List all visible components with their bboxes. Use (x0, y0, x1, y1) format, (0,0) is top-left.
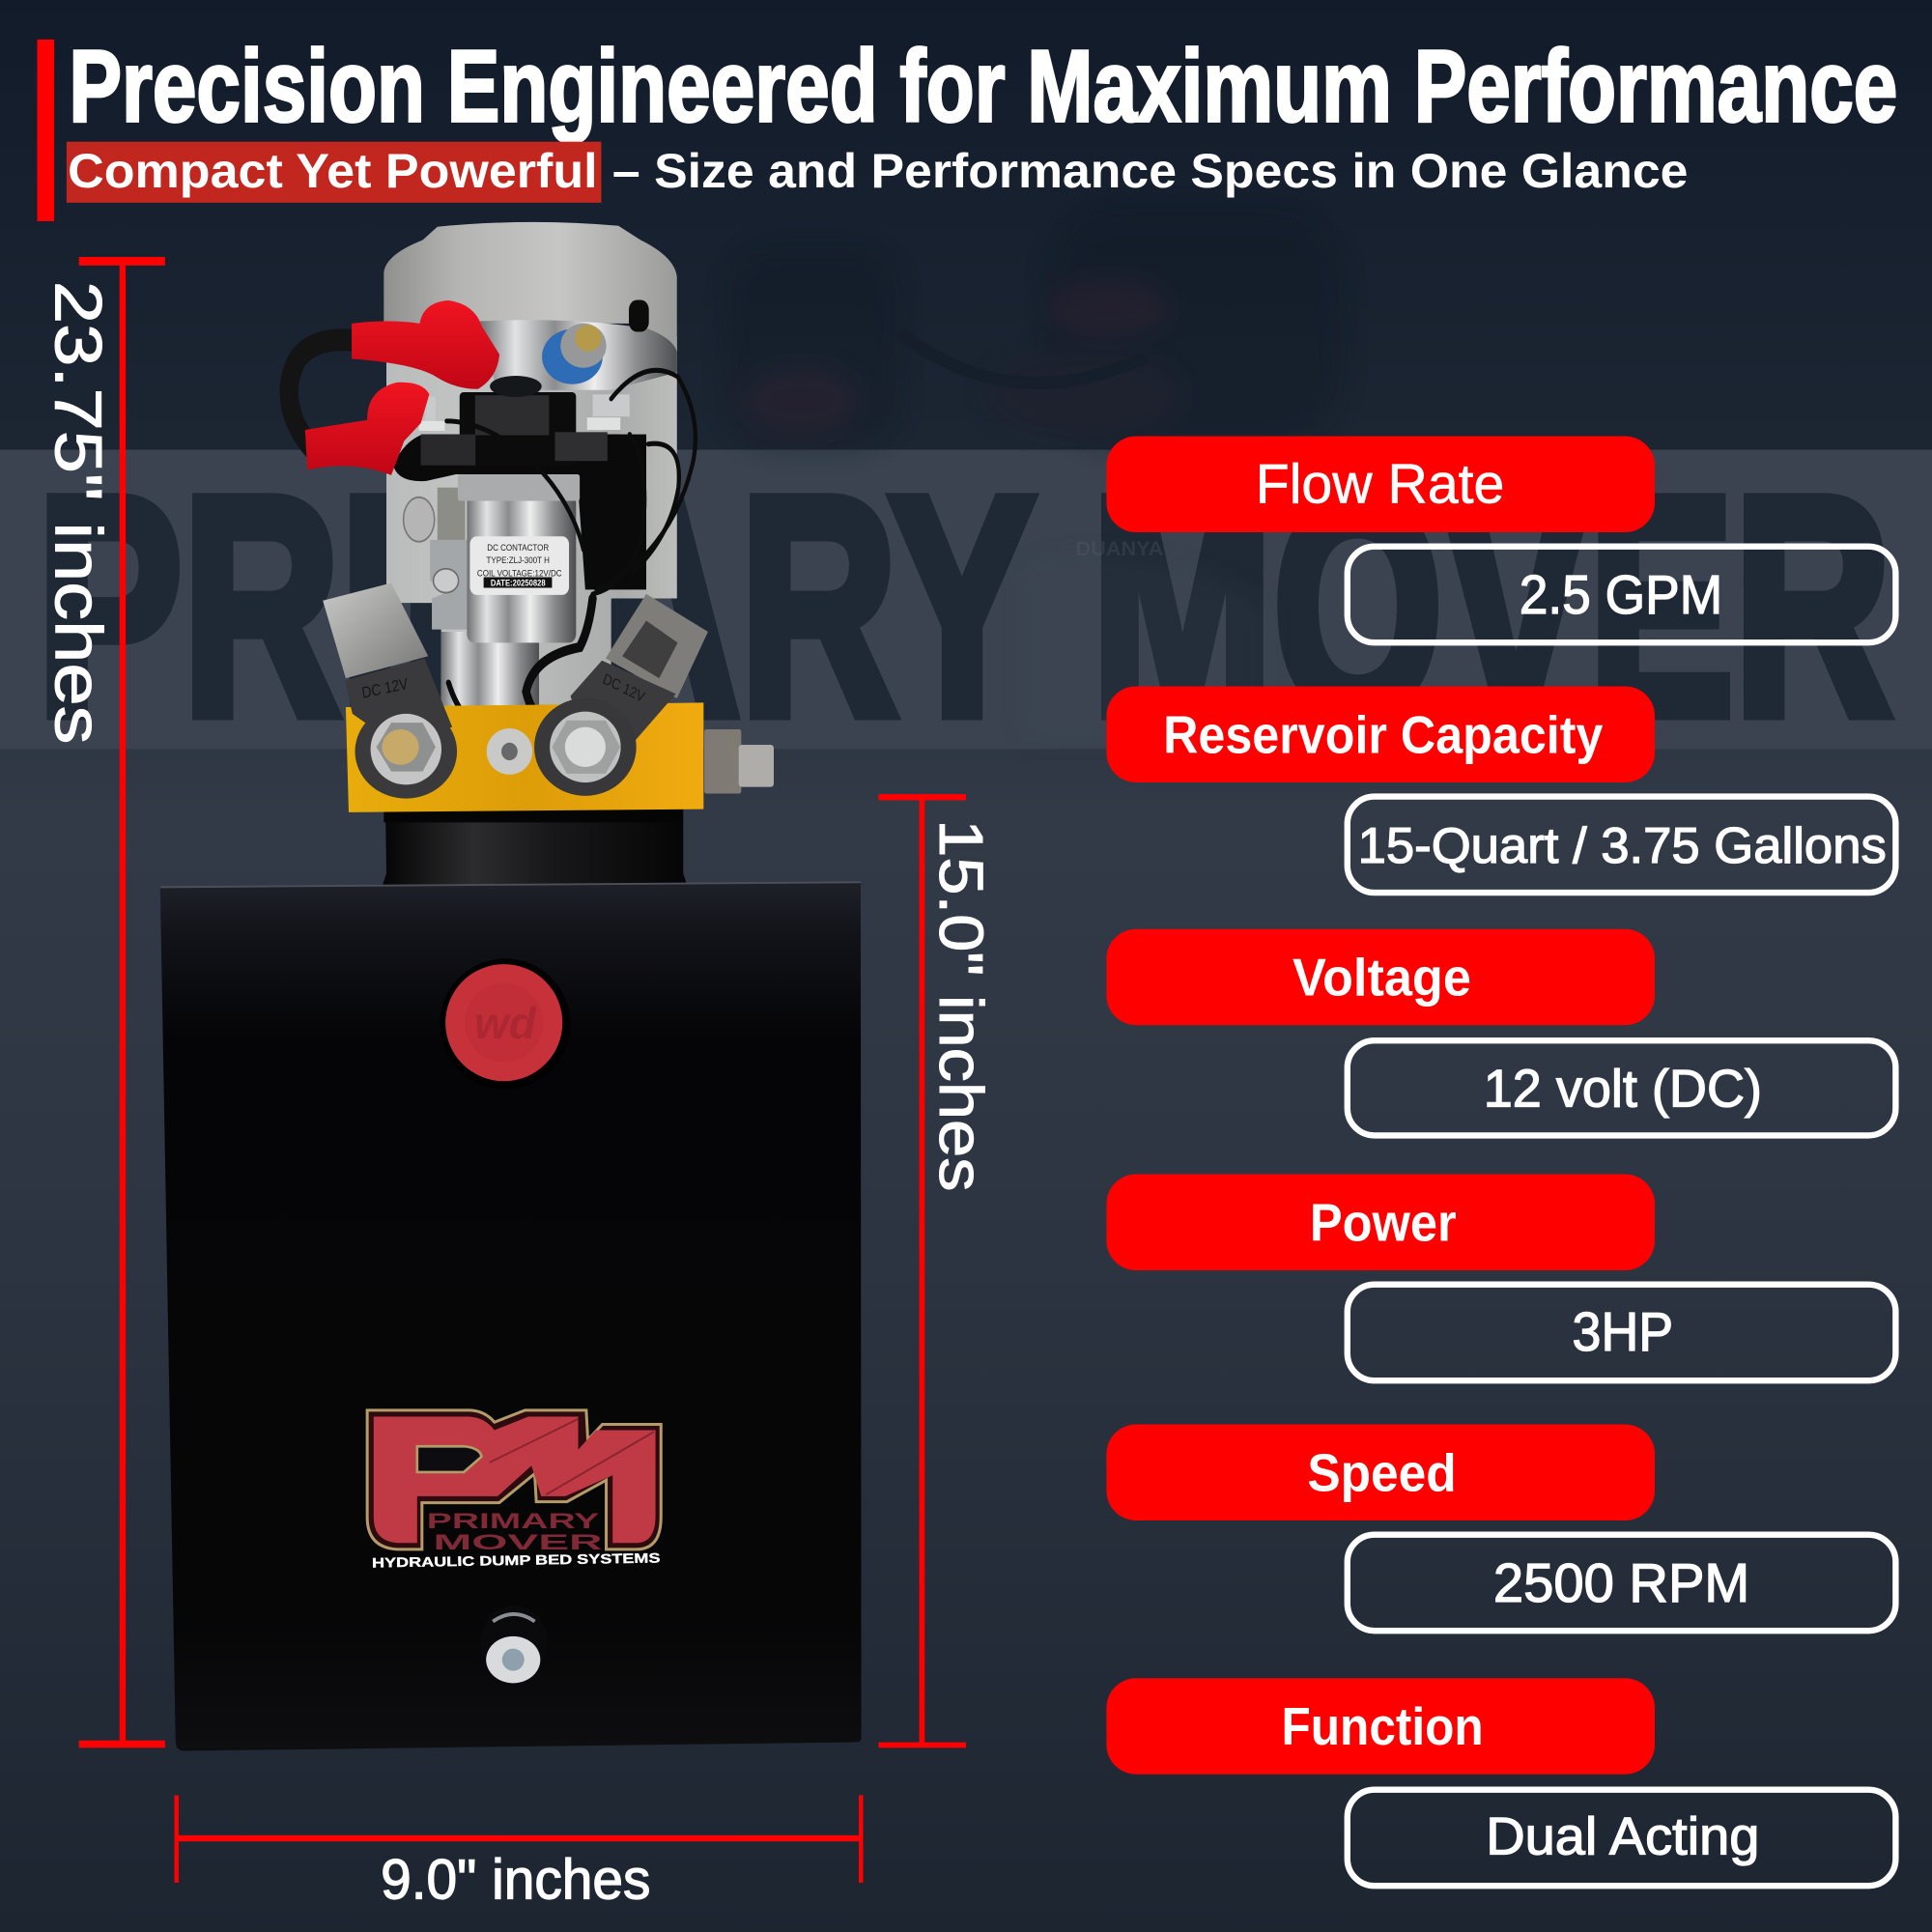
spec: speed (1106, 1424, 1895, 1631)
chrome band (480, 320, 677, 390)
red filler cap: wd (474, 998, 537, 1048)
dimension: tank width: 9.0" inches (381, 1849, 650, 1912)
motor slot (629, 299, 649, 332)
spec: voltage (1106, 929, 1895, 1135)
lower shaft (441, 632, 539, 707)
dimension: tank width (174, 1795, 863, 1912)
spec: reservoir capacity (1106, 686, 1895, 893)
contactor head (460, 392, 576, 466)
stud (438, 488, 466, 541)
faded product photo in background: DUANYA (1076, 536, 1164, 560)
right solenoid (534, 594, 708, 796)
blue post (542, 324, 607, 384)
brand logo: HYDRAULIC DUMP BED SYSTEMS (372, 1549, 661, 1571)
subtitle: – Size and Performance Specs in One Glance (612, 143, 1688, 198)
title accent bar (37, 40, 54, 221)
spec: power (1106, 1175, 1895, 1380)
spec: flow rate: Flow Rate (1256, 453, 1504, 515)
brand logo: MOVER (433, 1530, 603, 1554)
spec: function (1106, 1678, 1895, 1886)
centre plug (487, 728, 532, 775)
drain plug (480, 1605, 547, 1683)
subtitle (67, 142, 1688, 203)
motor end cap (384, 222, 677, 350)
fitting (704, 729, 774, 794)
yellow manifold (346, 702, 703, 812)
background band (0, 450, 1932, 750)
spec: flow rate: 2.5 GPM (1520, 564, 1722, 625)
contactor base plate (393, 435, 642, 481)
motor body (386, 337, 677, 705)
subtitle: Compact Yet Powerful (68, 143, 598, 198)
terminal bolts (419, 394, 630, 431)
product: hydraulic power unit (160, 222, 862, 1751)
contactor label: DC CONTACTOR (487, 542, 549, 553)
red boot lower (305, 383, 429, 475)
spec: speed: Speed (1307, 1442, 1457, 1502)
spec: voltage: 12 volt (DC) (1484, 1058, 1762, 1118)
dimension: overall height: 23.75" inches (41, 281, 115, 744)
spec: function: Dual Acting (1486, 1806, 1759, 1866)
terminal blocks (421, 435, 475, 466)
spec: power: Power (1310, 1192, 1457, 1252)
right solenoid: DC 12V (601, 671, 647, 706)
contactor label: COIL VOLTAGE:12V/DC (477, 568, 562, 579)
dimension: overall height (41, 257, 165, 1747)
neck (383, 820, 687, 885)
contactor label: TYPE:ZLJ-300T H (487, 555, 550, 565)
dimension: tank height (878, 794, 996, 1747)
contactor label: DATE:20250828 (491, 578, 546, 588)
left screw (404, 497, 435, 542)
small wires (446, 370, 696, 723)
dimension: tank height: 15.0" inches (926, 819, 996, 1191)
red filler cap (440, 958, 571, 1090)
red boot upper (352, 300, 499, 389)
motor and valve assembly (289, 222, 774, 885)
brand logo: PRIMARY (427, 1509, 600, 1533)
dark interior (574, 435, 646, 589)
spec: reservoir capacity: 15-Quart / 3.75 Gallons (1358, 818, 1887, 874)
contactor cylinder (467, 492, 576, 642)
faded product photo in background (727, 210, 1343, 739)
spec: voltage: Voltage (1293, 948, 1471, 1008)
reservoir tank (160, 882, 862, 1750)
spec: reservoir capacity: Reservoir Capacity (1163, 704, 1604, 764)
spec: power: 3HP (1573, 1301, 1673, 1362)
left solenoid: DC 12V (360, 675, 410, 702)
clamp (430, 540, 469, 630)
battery cable (289, 340, 355, 450)
spec: flow rate (1106, 437, 1895, 642)
brand logo (367, 1410, 661, 1571)
spec: speed: 2500 RPM (1493, 1552, 1749, 1613)
contactor label (469, 536, 569, 595)
contactor flange (458, 474, 580, 500)
left solenoid (323, 582, 457, 799)
spec: function: Function (1282, 1696, 1484, 1756)
